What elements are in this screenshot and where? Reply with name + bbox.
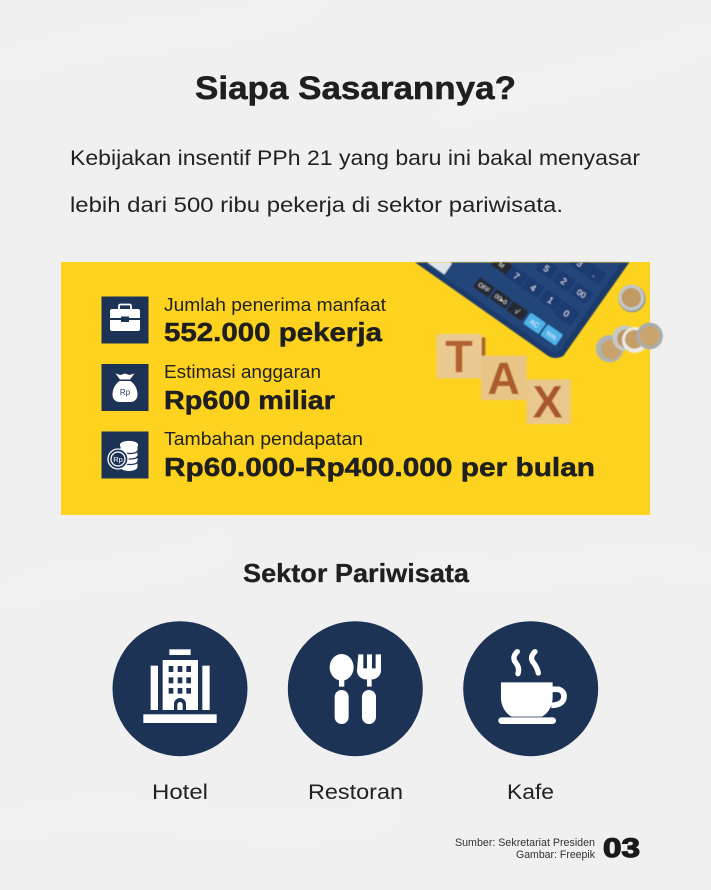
icon: briefcase [102,296,148,344]
panel background [61,262,650,515]
label: Tambahan pendapatan [164,429,363,449]
image: calculator, tax blocks and coins: 00▸0 [493,293,509,307]
icon: hotel building [112,621,248,756]
sector: hotel [112,621,248,804]
value: Rp60.000-Rp400.000 per bulan [164,452,595,482]
image: calculator, tax blocks and coins: 4 [528,282,538,293]
image: calculator, tax blocks and coins: M [497,261,505,270]
label: Kafe [507,780,554,804]
coins [596,285,663,362]
value: 552.000 pekerja [164,317,383,347]
label: Hotel [152,780,208,804]
row: jumlah penerima manfaat [102,295,386,347]
image: calculator, tax blocks and coins: 0 [562,308,571,319]
image: calculator, tax blocks and coins: 2 [559,276,569,287]
image: calculator, tax blocks and coins: 1 [546,295,555,306]
title: Siapa Sasarannya? [195,70,516,106]
label: Jumlah penerima manfaat [164,295,386,315]
page number: 03 [603,833,640,863]
source credits: Gambar: Freepik [516,849,595,861]
image: calculator, tax blocks and coins: 7 [512,271,521,282]
sector: restoran [288,621,423,804]
wooden blocks: TAX: X [533,377,563,428]
source credits: Sumber: Sekretariat Presiden [455,837,595,849]
intro text: lebih dari 500 ribu pekerja di sektor pariwisata. [70,193,563,217]
image: calculator, tax blocks and coins: AC [528,319,540,330]
image: calculator, tax blocks and coins: . [591,269,599,279]
panel: tax facts [61,252,663,515]
icon: spoon and fork [288,621,423,756]
image: calculator, tax blocks and coins: 3 [575,258,585,269]
row: estimasi anggaran [102,362,335,415]
icon: coins: Rp [113,455,123,464]
image: calculator, tax blocks and coins: 00 [575,287,588,301]
image: calculator, tax blocks and coins: %% [544,330,558,342]
row: tambahan pendapatan [102,429,595,482]
label: Estimasi anggaran [164,362,321,382]
image: calculator, tax blocks and coins: OFF [476,282,491,295]
source credits [455,837,595,861]
label: Restoran [308,780,403,804]
image: calculator, tax blocks and coins: 5 [542,263,551,274]
wooden blocks: TAX: A [487,353,520,404]
sector: kafe [463,621,598,804]
value: Rp600 miliar [164,385,335,415]
icon: coffee cup [463,621,598,756]
icon: coins [102,432,148,478]
icon: money bag: Rp [120,388,131,397]
image: calculator, tax blocks and coins: √ [513,307,522,317]
image: calculator, tax blocks and coins [415,252,663,428]
heading: sektor pariwisata: Sektor Pariwisata [243,558,470,588]
intro text: Kebijakan insentif PPh 21 yang baru ini bakal menyasar [70,146,640,170]
icon: money bag [102,364,148,411]
wooden blocks: TAX: T [445,332,473,383]
wooden blocks: TAX [437,332,571,428]
intro text [70,146,640,217]
